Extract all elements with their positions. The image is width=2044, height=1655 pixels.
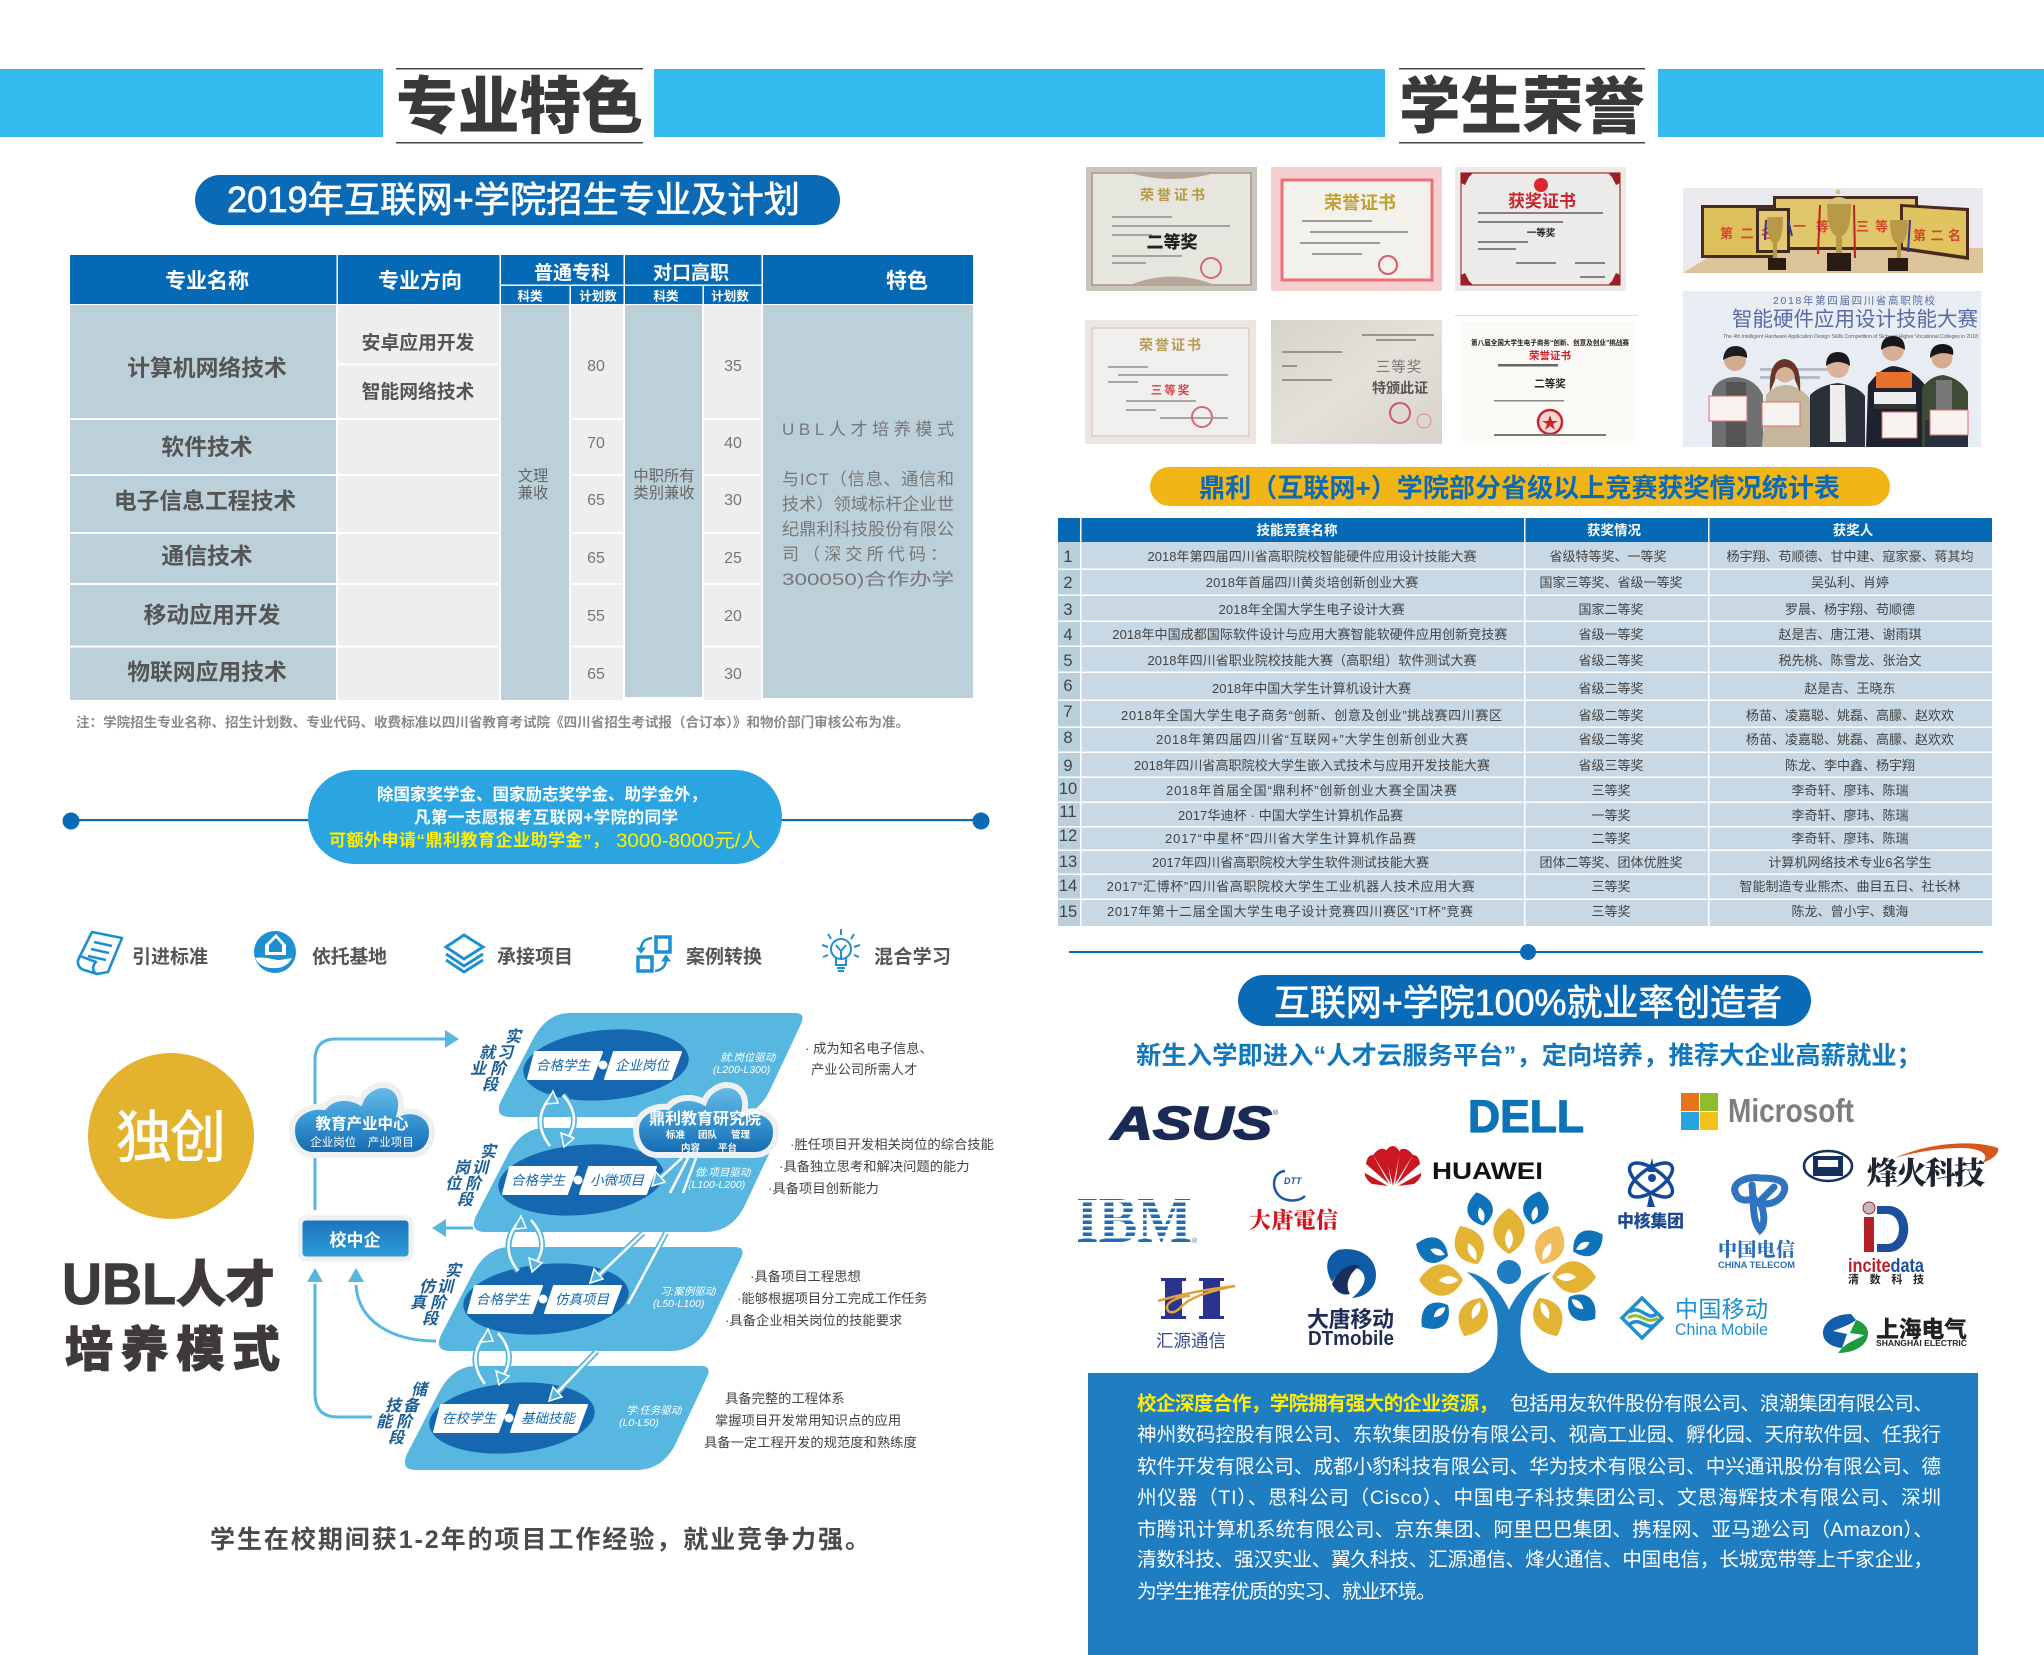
table header: 专业名称	[165, 270, 249, 293]
logo: IBM: ®	[1192, 1237, 1198, 1245]
competition names: 2018年首届全国“鼎利杯”创新创业大赛全国决赛	[1166, 783, 1457, 798]
logo: DELL: DELL	[1468, 1091, 1584, 1142]
stage outcomes text: 具备完整的工程体系	[725, 1390, 845, 1406]
icon: document scroll	[78, 932, 122, 974]
award levels: 三等奖	[1591, 904, 1631, 919]
awards table	[1058, 518, 1992, 926]
winners: 杨苗、凌嘉聪、姚磊、高朦、赵欢欢	[1746, 732, 1954, 747]
stage: 储备技能阶段: 基础技能	[521, 1411, 576, 1426]
awards header	[1058, 518, 1992, 542]
row numbers: 13	[1059, 853, 1077, 871]
icon row	[78, 929, 951, 974]
stage: 储备技能阶段: 在校学生	[442, 1411, 497, 1426]
major directions: 安卓应用开发	[362, 331, 475, 353]
box: 校中企	[300, 1218, 411, 1259]
award levels: 国家二等奖	[1578, 602, 1644, 617]
features text	[782, 420, 954, 589]
winners: 李奇轩、廖玮、陈瑞	[1791, 783, 1909, 798]
awards header: 获奖人	[1833, 522, 1874, 538]
award levels: 国家三等奖、省级一等奖	[1539, 575, 1683, 590]
features text: 司（深交所代码：	[782, 545, 947, 564]
pill title: 100%就业率: 互联网+学院100%就业率创造者	[1274, 982, 1782, 1023]
cloud: 鼎利教育研究院: 标准	[666, 1129, 686, 1141]
plan counts vocational: 35	[724, 358, 742, 375]
arrowheads	[307, 1030, 459, 1282]
plan counts general: 65	[587, 666, 605, 683]
logo: 大唐电信: 大唐電信	[1249, 1204, 1338, 1235]
label: 依托基地: 依托基地	[312, 946, 387, 968]
competition names: 2018年四川省高职院校大学生嵌入式技术与应用开发技能大赛	[1134, 758, 1490, 773]
logo: Huawei: HUAWEI	[1432, 1158, 1543, 1185]
stage outcomes text: ·具备独立思考和解决问题的能力	[779, 1158, 970, 1174]
logo: DTmobile	[1307, 1249, 1394, 1350]
row numbers	[1059, 548, 1077, 921]
plan counts vocational: 30	[724, 666, 742, 683]
row numbers: 5	[1063, 652, 1073, 670]
plan counts vocational	[724, 358, 742, 683]
table header: 科类	[653, 288, 679, 304]
cloud: 鼎利教育研究院: 管理	[731, 1129, 751, 1141]
badge: 独创	[88, 1053, 254, 1219]
award levels: 省级一等奖	[1578, 627, 1644, 642]
row numbers: 10	[1059, 780, 1077, 798]
logo: 烽火科技	[1804, 1143, 1998, 1193]
award levels: 三等奖	[1591, 879, 1631, 894]
competition names: 2017“中星杯”四川省大学生计算机作品赛	[1165, 831, 1416, 846]
row numbers: 3	[1063, 601, 1073, 619]
competition names: 2017年第十二届全国大学生电子设计竞赛四川赛区“IT杯”竞赛	[1107, 904, 1473, 919]
stage: 实习就业阶段	[470, 1013, 803, 1117]
panel: enterprise resources: 神州数码控股有限公司、东软集团股份有限公司、视高工业园、孵化园、天府软件园、任我行	[1137, 1424, 1941, 1446]
features text: 纪鼎利科技股份有限公	[782, 520, 954, 539]
competition names: 2018年第四届四川省高职院校智能硬件应用设计技能大赛	[1148, 549, 1476, 564]
stage outcomes text: 产业公司所需人才	[811, 1062, 917, 1077]
winners: 税先桃、陈雪龙、张治文	[1778, 653, 1922, 668]
certificate 2	[1271, 167, 1442, 291]
stage: 仿真实训阶段: (L50-L100)	[653, 1298, 704, 1310]
competition names: 2018年首届四川黄炎培创新创业大赛	[1206, 575, 1418, 590]
row numbers: 2	[1063, 574, 1073, 592]
panel: enterprise resources	[1088, 1373, 1978, 1655]
competition names: 2017华迪杯 · 中国大学生计算机作品赛	[1178, 808, 1403, 823]
scholarship callout	[62, 770, 990, 864]
logo: DTmobile: 大唐移动	[1307, 1307, 1394, 1332]
row numbers: 1	[1063, 548, 1073, 566]
winners: 赵是吉、唐江港、谢雨琪	[1778, 627, 1922, 642]
certificate 1: 荣誉证书	[1140, 187, 1208, 203]
photo: trophies: 第二名	[1913, 228, 1961, 243]
logo: China Telecom: CHINA TELECOM	[1718, 1260, 1795, 1271]
connector arrows	[315, 1039, 473, 1417]
heading: UBL人才培养模式	[62, 1252, 280, 1377]
badge: 独创: 独创	[116, 1106, 226, 1169]
awards header: 获奖情况	[1587, 522, 1641, 538]
features text: 300050)合作办学	[782, 570, 954, 589]
enrollment table	[70, 255, 973, 700]
winners: 罗晨、杨宇翔、苟顺德	[1785, 602, 1915, 617]
photo: award group: 2018年第四届四川省高职院校	[1773, 294, 1936, 307]
major directions: 智能网络技术	[362, 380, 475, 402]
row numbers: 14	[1059, 877, 1077, 895]
competition names: 2018年中国大学生计算机设计大赛	[1212, 681, 1411, 696]
students and teacher	[1712, 336, 1968, 447]
competition names: 2018年全国大学生电子设计大赛	[1219, 602, 1405, 617]
stage: 实习就业阶段: (L200-L300)	[713, 1064, 770, 1076]
plan counts vocational: 30	[724, 492, 742, 509]
photo: award group	[1683, 291, 1981, 447]
stage: 仿真实训阶段: 仿真项目	[555, 1292, 609, 1307]
winners: 陈龙、李中鑫、杨宇翔	[1785, 758, 1915, 773]
competition names: 2018年中国成都国际软件设计与应用大赛智能软硬件应用创新竞技赛	[1112, 627, 1507, 642]
section banner: blue band left	[0, 69, 2044, 137]
logo: ASUS: ASUS	[1110, 1097, 1272, 1149]
panel: enterprise resources: 包括用友软件股份有限公司、浪潮集团有限公司、	[1510, 1393, 1933, 1415]
divider with dot	[1069, 944, 1983, 960]
competition names	[1107, 549, 1507, 919]
certificate 4	[1085, 320, 1256, 444]
stage: 储备技能阶段: 储备阶段技能	[376, 1381, 430, 1447]
award levels: 三等奖	[1591, 783, 1631, 798]
cloud: 教育产业中心: 教育产业中心	[315, 1114, 409, 1133]
subtitle: 新生入学即进入“人才云服务平台”，定向培养，推荐大企业高薪就业；	[1136, 1041, 1922, 1070]
scholarship callout: 凡第一志愿报考互联网+学院的同学	[414, 807, 678, 827]
major names: 软件技术	[161, 434, 253, 460]
heading: 专业特色: 专业特色	[396, 73, 643, 142]
major names: 通信技术	[161, 543, 253, 569]
stage: 岗位实训阶段: 做:项目驱动	[695, 1167, 752, 1179]
winners: 李奇轩、廖玮、陈瑞	[1791, 831, 1909, 846]
panel: enterprise resources: 校企深度合作，学院拥有强大的企业资源，	[1137, 1392, 1498, 1415]
awards header: 技能竞赛名称	[1256, 522, 1338, 538]
row numbers: 4	[1063, 626, 1073, 644]
competition names: 2018年第四届四川省“互联网+”大学生创新创业大赛	[1156, 732, 1468, 747]
scholarship callout: 除国家奖学金、国家励志奖学金、助学金外，	[377, 784, 707, 804]
summary sentence: 学生在校期间获1-2年的项目工作经验，就业竞争力强。	[210, 1526, 870, 1554]
stage outcomes text: ·具备项目工程思想	[750, 1268, 861, 1284]
logo: 汇源通信	[1156, 1278, 1235, 1351]
stage outcomes text: ·胜任项目开发相关岗位的综合技能	[790, 1137, 994, 1152]
major names: 物联网应用技术	[127, 659, 287, 685]
label: 混合学习: 混合学习	[874, 945, 951, 968]
competition names: 2018年全国大学生电子商务“创新、创意及创业”挑战赛四川赛区	[1121, 708, 1502, 723]
cloud: 鼎利教育研究院: 团队	[698, 1129, 718, 1141]
photo: award group: 智能硬件应用设计技能大赛	[1732, 308, 1978, 331]
plan counts general: 65	[587, 550, 605, 567]
stage outcomes text: 具备一定工程开发的规范度和熟练度	[704, 1434, 917, 1450]
panel: enterprise resources: 清数科技、强汉实业、翼久科技、汇源通信、烽火通信、中国电信，长城宽带等上千家企业，	[1137, 1549, 1933, 1571]
logo: China Mobile: China Mobile	[1675, 1320, 1768, 1339]
table header: 科类	[517, 288, 543, 304]
logo: China Telecom	[1718, 1178, 1795, 1271]
features text: 技术）领域标杆企业世	[782, 495, 954, 514]
panel: enterprise resources: 软件开发有限公司、成都小豹科技有限公司、华为技术有限公司、中兴通讯股份有限公司、德	[1137, 1456, 1941, 1478]
winners: 杨宇翔、苟顺德、甘中建、寇家豪、蒋其均	[1726, 549, 1974, 564]
stage: 实习就业阶段: 就:岗位驱动	[720, 1052, 777, 1064]
logo: ASUS: ®	[1273, 1109, 1279, 1117]
cloud: 鼎利教育研究院: 平台	[718, 1142, 737, 1154]
logo: 中核集团	[1617, 1157, 1684, 1231]
winners: 吴弘利、肖婷	[1811, 575, 1889, 590]
diagonal arrows	[549, 1158, 696, 1401]
logo: 大唐电信	[1249, 1171, 1338, 1235]
award levels: 省级特等奖、一等奖	[1549, 549, 1667, 564]
table header: 对口高职	[653, 261, 729, 284]
stage: 仿真实训阶段	[410, 1247, 743, 1351]
certificate 6: 荣誉证书	[1529, 349, 1571, 362]
winners: 陈龙、曾小宇、魏海	[1791, 904, 1909, 919]
table header: 普通专科	[534, 262, 610, 284]
certificate 5: 三等奖	[1376, 358, 1422, 376]
row numbers: 6	[1063, 677, 1073, 695]
panel: enterprise resources: 市腾讯计算机系统有限公司、京东集团、阿里巴巴集团、携程网、亚马逊公司（Amazon）、	[1137, 1519, 1933, 1541]
award levels: 省级二等奖	[1578, 653, 1644, 668]
award levels	[1539, 549, 1683, 919]
category text: 类别兼收	[633, 485, 695, 502]
stage: 仿真实训阶段: 合格学生	[476, 1292, 531, 1307]
plan counts vocational: 20	[724, 608, 742, 625]
certificate 4: 荣誉证书	[1139, 337, 1203, 353]
photo: award group: The 4th Intelligent Hardware Application Design Skills Competition of Sichuan Higher Vocational Colleges in 2018	[1723, 334, 1978, 340]
stage: 实习就业阶段: 企业岗位	[615, 1058, 670, 1073]
icon: light bulb	[822, 929, 860, 971]
logo: incitedata: incitedata	[1848, 1256, 1924, 1277]
award levels: 省级三等奖	[1578, 758, 1644, 773]
certificate 6: 二等奖	[1534, 377, 1566, 390]
cloud: 教育产业中心	[292, 1085, 432, 1155]
category text	[518, 468, 695, 502]
cloud: 鼎利教育研究院: 鼎利教育研究院	[649, 1109, 761, 1128]
stage: 仿真实训阶段: 实训阶段仿真	[410, 1262, 463, 1328]
scholarship callout: 3000-8000元/人	[616, 830, 761, 852]
stage outcomes text: ·能够根据项目分工完成工作任务	[737, 1291, 928, 1306]
winners: 李奇轩、廖玮、陈瑞	[1791, 808, 1909, 823]
stage outcomes text	[704, 1040, 994, 1450]
table header: 专业方向	[378, 269, 462, 293]
features text: 与ICT（信息、通信和	[782, 470, 954, 489]
logo: Microsoft: Microsoft	[1728, 1092, 1854, 1129]
logo: IBM: IBM	[1076, 1184, 1192, 1257]
certificate 2: 荣誉证书	[1324, 193, 1396, 213]
row numbers: 12	[1059, 827, 1077, 845]
award levels: 省级二等奖	[1578, 708, 1644, 723]
certificate 5	[1271, 320, 1442, 444]
panel: enterprise resources: 州仪器（TI）、思科公司（Cisco）、中国电子科技集团公司、文思海辉技术有限公司、深圳	[1137, 1487, 1941, 1509]
row numbers: 11	[1059, 803, 1077, 821]
cloud: 鼎利教育研究院: 内容	[681, 1142, 701, 1154]
stage: 实习就业阶段: 实习阶段就业	[470, 1028, 523, 1094]
heading: 学生荣誉: 学生荣誉	[1399, 73, 1645, 142]
heading: UBL人才培养模式: UBL	[62, 1252, 176, 1317]
major names	[114, 355, 296, 685]
stage: 储备技能阶段: (L0-L50)	[619, 1417, 659, 1429]
table header: 计划数	[711, 288, 749, 304]
stage outcomes text: · 成为知名电子信息、	[805, 1040, 933, 1056]
box: 校中企: 校中企	[330, 1230, 380, 1250]
award levels: 省级二等奖	[1578, 732, 1644, 747]
photo: trophies	[1683, 188, 1983, 273]
category text: 文理	[518, 468, 548, 485]
competition names: 2017“汇博杯”四川省高职院校大学生工业机器人技术应用大赛	[1107, 879, 1475, 894]
label: 承接项目: 承接项目	[497, 946, 573, 968]
label: 案例转换: 案例转换	[686, 945, 762, 968]
stage: 仿真实训阶段: 习:案例驱动	[660, 1286, 717, 1298]
plan counts general: 80	[587, 358, 605, 375]
features text: UBL人才培养模式	[782, 420, 954, 439]
stage: 实习就业阶段: 合格学生	[536, 1058, 591, 1073]
logo: China Telecom: 中国电信	[1718, 1235, 1795, 1262]
competition names: 2018年四川省职业院校技能大赛（高职组）软件测试大赛	[1148, 653, 1476, 668]
winners: 赵是吉、王晓东	[1804, 681, 1896, 696]
major names: 移动应用开发	[144, 602, 281, 628]
winners: 智能制造专业熊杰、曲目五日、社长林	[1739, 879, 1961, 894]
award levels: 团体二等奖、团体优胜奖	[1539, 855, 1683, 870]
logo: Shanghai Electric	[1823, 1314, 1967, 1353]
logo: incitedata: 清数科技	[1848, 1272, 1924, 1286]
competition names: 2017年四川省高职院校大学生软件测试技能大赛	[1152, 855, 1429, 870]
plan counts vocational: 40	[724, 435, 742, 452]
row numbers: 7	[1063, 703, 1073, 721]
logo: Microsoft	[1681, 1092, 1854, 1130]
certificates	[1085, 167, 1638, 444]
certificate 3: 一等奖	[1527, 227, 1556, 239]
table header: 特色	[886, 270, 928, 293]
logo: Shanghai Electric: SHANGHAI ELECTRIC	[1876, 1339, 1967, 1348]
photo: trophies: 三等	[1856, 219, 1888, 234]
logo: Shanghai Electric: 上海电气	[1876, 1316, 1967, 1342]
logo: 汇源通信: 汇源通信	[1156, 1331, 1226, 1351]
logo: 烽火科技: 烽火科技	[1866, 1148, 1985, 1193]
row numbers: 8	[1063, 729, 1073, 747]
stage: 储备技能阶段	[376, 1366, 709, 1470]
logo: DTmobile: DTmobile	[1308, 1328, 1394, 1350]
certificate 3: 获奖证书	[1508, 191, 1576, 211]
photo: trophies: 第二名	[1720, 226, 1774, 241]
major directions	[362, 331, 475, 402]
stage: 岗位实训阶段: 实训阶段岗位	[445, 1143, 498, 1209]
pill title: 招生专业及计划: 2019年互联网+学院招生专业及计划	[227, 179, 800, 220]
row numbers: 15	[1059, 903, 1077, 921]
certificate 5: 特颁此证	[1372, 380, 1428, 396]
stage: 岗位实训阶段: (L100-L200)	[688, 1179, 745, 1191]
table note: 注：学院招生专业名称、招生计划数、专业代码、收费标准以四川省教育考试院《四川省招生考试报（合订本）》和物价部门审核公布为准。	[76, 714, 909, 730]
winners: 杨苗、凌嘉聪、姚磊、高朦、赵欢欢	[1746, 708, 1954, 723]
pill title: 竞赛获奖统计表	[1150, 467, 1890, 506]
photo: trophies: 一等	[1793, 219, 1829, 234]
table header	[70, 255, 973, 304]
plan counts general	[587, 358, 605, 683]
stage: 储备技能阶段: 学:任务驱动	[626, 1405, 683, 1417]
icon: case conversion	[637, 937, 670, 971]
logo: incitedata	[1848, 1202, 1924, 1286]
category text: 兼收	[518, 485, 548, 502]
winners: 计算机网络技术专业6名学生	[1768, 855, 1932, 870]
winners	[1726, 549, 1974, 919]
certificate 1: 二等奖	[1146, 232, 1198, 252]
scholarship callout: 可额外申请“鼎利教育企业助学金”，	[329, 830, 609, 850]
table header: 计划数	[579, 288, 617, 304]
plan counts general: 70	[587, 435, 605, 452]
cloud: 鼎利教育研究院	[636, 1085, 776, 1155]
stage outcomes text: ·具备项目创新能力	[768, 1180, 879, 1196]
stage: 岗位实训阶段: 合格学生	[511, 1173, 566, 1188]
certificate 3	[1455, 167, 1626, 291]
stage: 岗位实训阶段: 小微项目	[590, 1173, 644, 1188]
plan counts general: 65	[587, 492, 605, 509]
held certificates	[1709, 396, 1968, 438]
award levels: 省级二等奖	[1578, 681, 1644, 696]
certificate 1	[1086, 167, 1257, 291]
category text: 中职所有	[633, 468, 695, 485]
stage outcomes text: ·具备企业相关岗位的技能要求	[725, 1312, 902, 1328]
logo: 中核集团: 中核集团	[1617, 1211, 1684, 1231]
enterprise logos	[1074, 1091, 1998, 1353]
award levels: 一等奖	[1591, 808, 1631, 823]
cloud: 教育产业中心: 企业岗位 产业项目	[310, 1135, 414, 1149]
award levels: 二等奖	[1591, 831, 1631, 846]
certificate 4: 三等奖	[1151, 383, 1191, 397]
logo: China Mobile	[1622, 1296, 1768, 1339]
logo: Huawei	[1365, 1146, 1543, 1186]
UBL flow diagram	[292, 1013, 803, 1470]
plan counts vocational: 25	[724, 550, 742, 567]
heading: UBL人才培养模式: 人才	[176, 1257, 275, 1313]
certificate 6	[1455, 315, 1638, 443]
icon: house in hand	[254, 931, 296, 973]
panel: enterprise resources: 为学生推荐优质的实习、就业环境。	[1137, 1581, 1436, 1603]
certificate 6: 第八届全国大学生电子商务“创新、创意及创业”挑战赛	[1471, 338, 1629, 347]
leaves	[1412, 1189, 1609, 1342]
major names: 计算机网络技术	[127, 355, 287, 381]
icon: layers	[446, 935, 483, 972]
plan counts general: 55	[587, 608, 605, 625]
logo: 大唐电信: DTT	[1284, 1176, 1303, 1186]
label: 引进标准: 引进标准	[132, 946, 208, 968]
stage outcomes text: 掌握项目开发常用知识点的应用	[715, 1412, 901, 1428]
logo: China Mobile: 中国移动	[1675, 1296, 1768, 1322]
heading: UBL人才培养模式: 培养模式	[65, 1324, 280, 1377]
stage: 岗位实训阶段	[445, 1128, 778, 1232]
exchange arrows	[475, 1091, 574, 1385]
tree logo	[1412, 1189, 1609, 1374]
pill title: 竞赛获奖统计表: 鼎利（互联网+）学院部分省级以上竞赛获奖情况统计表	[1199, 473, 1840, 503]
row numbers: 9	[1063, 757, 1073, 775]
major names: 电子信息工程技术	[114, 488, 296, 514]
